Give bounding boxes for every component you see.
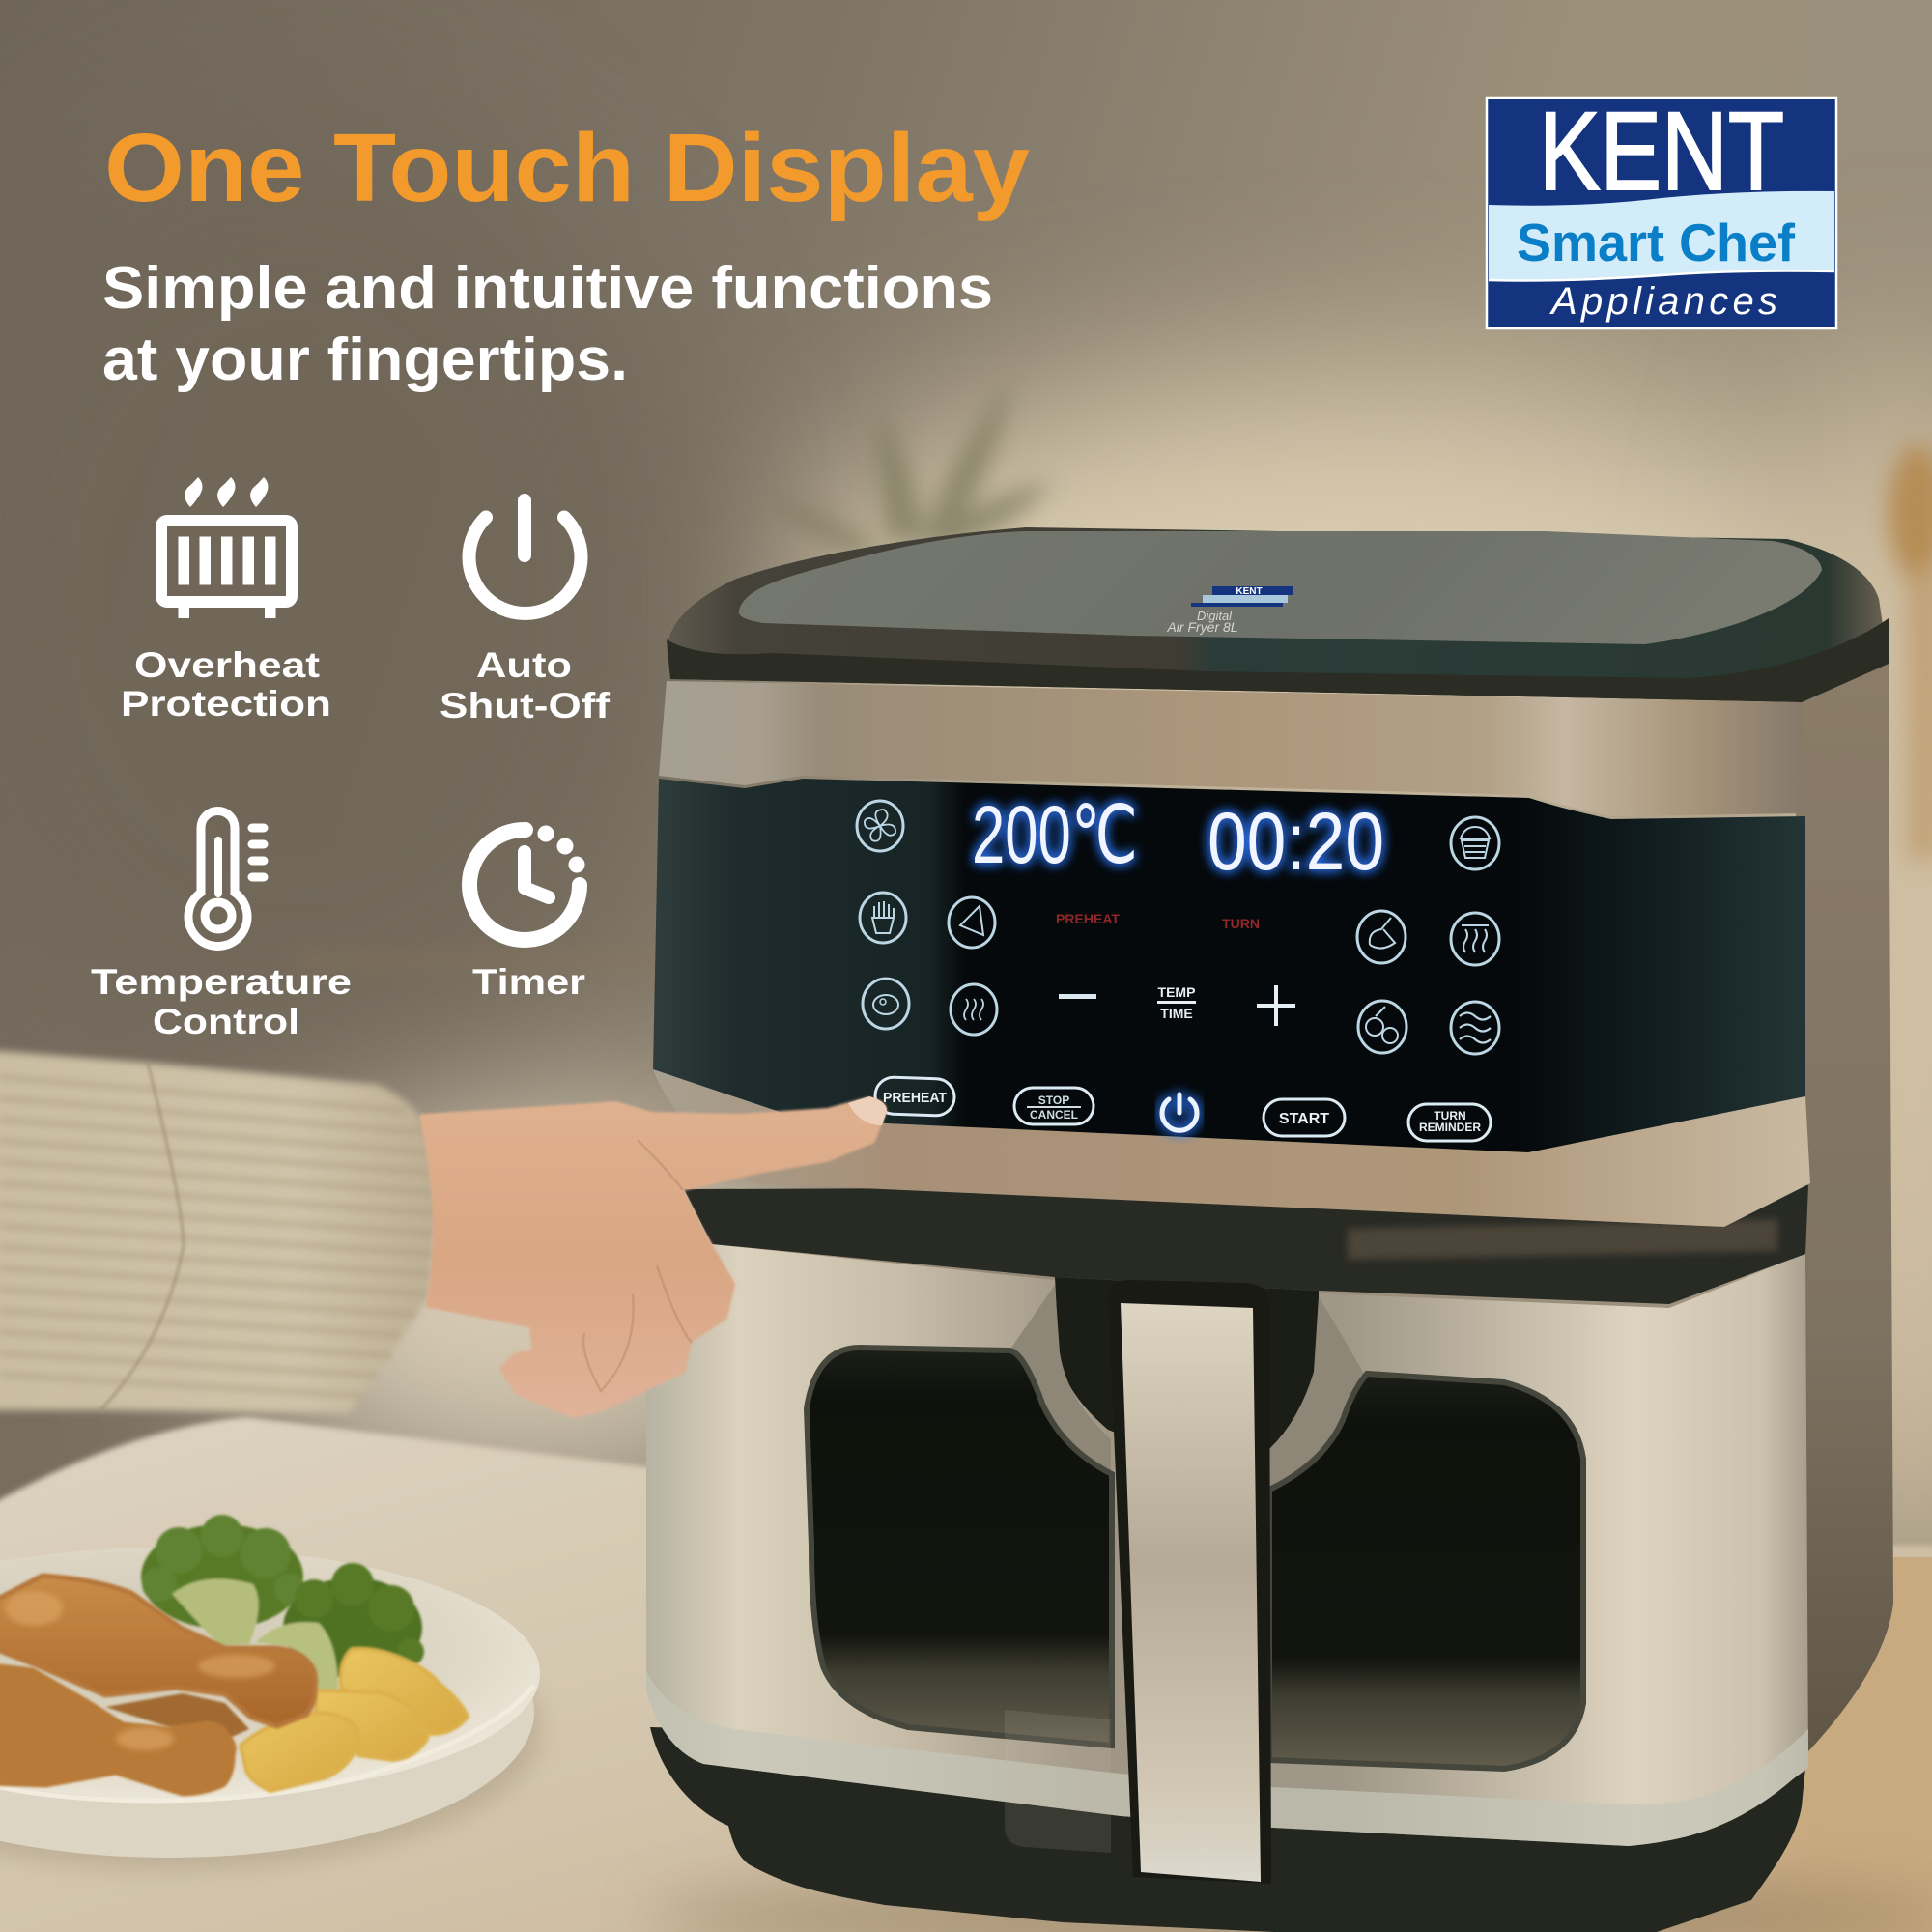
finger creases	[583, 1140, 692, 1391]
brown reflection on dark band	[1348, 1219, 1777, 1260]
power key	[1162, 1094, 1197, 1130]
plate of food	[0, 1515, 541, 1869]
right viewing window	[1269, 1374, 1583, 1769]
subtitle	[102, 255, 993, 393]
temp time key	[1157, 984, 1196, 1021]
basket silver body	[646, 1244, 1808, 1846]
temp time key: TIME	[1160, 1006, 1193, 1021]
icon: fan	[857, 801, 903, 851]
chicken highlights	[5, 1591, 275, 1750]
control panel	[653, 779, 1805, 1152]
chicken drumstick top	[0, 1576, 316, 1726]
stop cancel key: STOP	[1038, 1094, 1069, 1107]
red turn label: TURN	[1222, 916, 1260, 931]
round function keys	[857, 801, 1499, 1054]
broccoli	[141, 1515, 424, 1692]
turn reminder key	[1408, 1104, 1491, 1141]
plus key	[1257, 985, 1295, 1026]
icon: heater	[161, 477, 292, 618]
label: Overheat	[134, 645, 320, 685]
potato wedges	[241, 1649, 468, 1791]
label	[121, 645, 331, 724]
icon: waves	[1451, 1002, 1499, 1054]
icon: power	[469, 500, 582, 613]
label: Protection	[121, 684, 331, 724]
feature: auto shut-off	[440, 500, 611, 725]
handle	[1005, 1280, 1271, 1884]
fryer right side	[1787, 662, 1893, 1768]
panel glass	[653, 779, 1805, 1152]
plate	[0, 1548, 541, 1869]
feature: temperature control	[91, 811, 352, 1041]
chicken drumstick underneath	[105, 1693, 249, 1739]
left viewing window	[807, 1348, 1112, 1746]
center black bracket recess	[1055, 1277, 1319, 1492]
logo appliances: Appliances	[1549, 280, 1777, 323]
feature: timer	[469, 825, 585, 1002]
chicken drumstick lower	[0, 1665, 234, 1794]
logo product line: Smart Chef	[1517, 213, 1796, 272]
label	[440, 645, 611, 725]
icon: swirl heat	[951, 984, 997, 1035]
icon: steak	[863, 979, 909, 1029]
stop cancel key: CANCEL	[1030, 1108, 1078, 1122]
lid logo text	[1166, 586, 1293, 635]
logo: KENT Smart Chef Appliances	[1487, 90, 1836, 328]
air fryer	[646, 527, 1932, 1932]
label: Temperature	[91, 962, 352, 1002]
temperature readout: 200℃	[972, 789, 1138, 880]
lid logo text: KENT	[1236, 586, 1263, 597]
lid outer	[667, 527, 1889, 702]
icon: thermometer	[188, 811, 264, 946]
hand pressing preheat	[423, 1096, 887, 1414]
icon: chicken	[1357, 911, 1406, 963]
start key	[1264, 1099, 1345, 1136]
right silver bracket	[1269, 1296, 1364, 1488]
icon: fries	[860, 893, 906, 943]
label: Auto	[476, 645, 572, 685]
dark gap under control band	[684, 1185, 1808, 1304]
turn reminder key: TURN	[1434, 1109, 1466, 1122]
icon: clock	[469, 825, 585, 940]
preheat key: PREHEAT	[883, 1090, 947, 1106]
table top	[0, 1417, 1932, 1932]
logo wordmark: KENT	[1539, 90, 1784, 213]
subtitle: at your fingertips.	[102, 327, 628, 393]
preheat key	[874, 1077, 955, 1116]
timer readout: 00:20	[1208, 796, 1384, 887]
icon: fruit	[1358, 1001, 1406, 1053]
start key: START	[1279, 1111, 1329, 1127]
label: Timer	[472, 962, 585, 1002]
base	[650, 1727, 1808, 1932]
temp time key: TEMP	[1158, 984, 1195, 1000]
stop cancel key	[1014, 1088, 1094, 1124]
minus key	[1059, 994, 1096, 999]
title: One Touch Display	[104, 114, 1030, 222]
lid lower dark band	[667, 618, 1889, 702]
lid logo text: Air Fryer 8L	[1166, 619, 1238, 635]
subtitle: Simple and intuitive functions	[102, 255, 993, 322]
basket lower strip	[646, 1671, 1808, 1846]
left silver bracket	[1009, 1285, 1111, 1472]
icon: heat waves	[1451, 913, 1499, 965]
label: Shut-Off	[440, 686, 611, 725]
sleeve	[0, 1048, 440, 1413]
lower chrome band	[653, 1069, 1810, 1227]
label: Control	[153, 1002, 299, 1041]
fingernail	[848, 1096, 887, 1125]
lid glass top	[739, 531, 1822, 644]
label	[91, 962, 352, 1041]
red preheat label: PREHEAT	[1056, 911, 1120, 926]
logo light wave band	[1489, 191, 1834, 279]
fryer shadow on table	[647, 1879, 1932, 1932]
lid logo text: Digital	[1197, 609, 1233, 623]
feature: overheat protection	[121, 477, 331, 724]
turn reminder key: REMINDER	[1419, 1121, 1481, 1134]
icon: pizza slice	[949, 897, 995, 948]
icon: cupcake	[1451, 817, 1499, 869]
upper chrome band	[659, 681, 1805, 816]
